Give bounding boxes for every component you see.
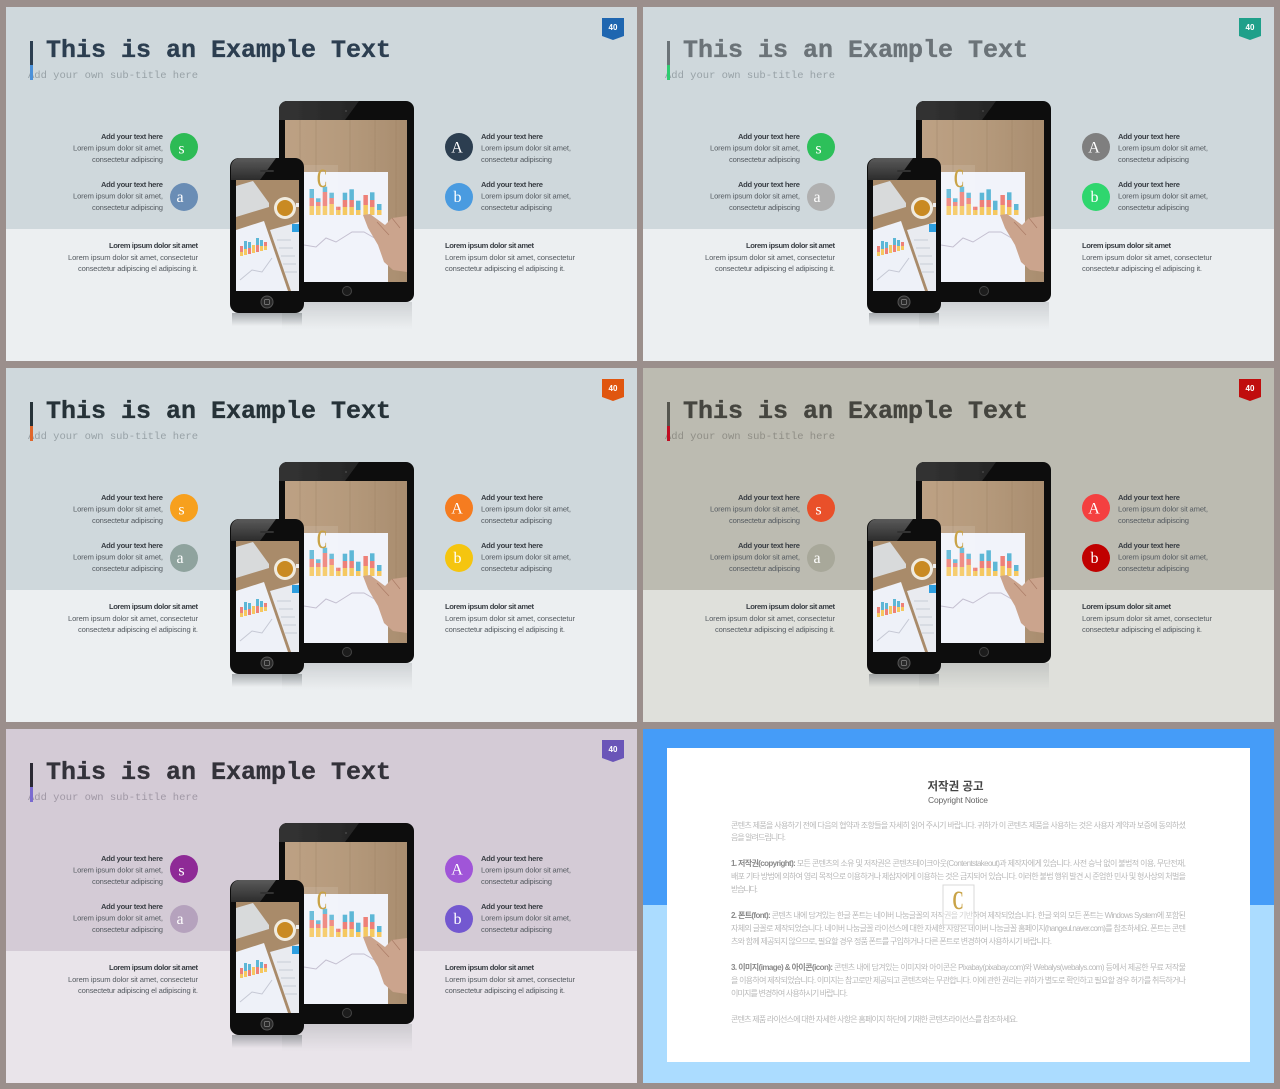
text block: right top: consectetur adipiscing [1118,155,1189,164]
page badge: 40 [1246,23,1255,32]
subtitle: Add your own sub-title here [665,70,835,82]
text block: right top: consectetur adipiscing [481,877,552,886]
text block: bottom left [705,602,835,634]
text block: bottom right: consectetur adipiscing el adipiscing it. [1082,264,1202,273]
icon: s: s [178,862,185,880]
text block: right second: Lorem ipsum dolor sit amet, [1118,552,1208,562]
icon: a [807,183,835,211]
text block: left top: Add your text here [101,854,163,863]
text block: left second: Lorem ipsum dolor sit amet, [710,552,800,562]
icon: s: s [815,140,822,158]
panel background [643,729,1274,1083]
text block: left top [710,493,800,525]
text block: left second: Lorem ipsum dolor sit amet, [710,192,800,200]
text block: bottom left: consectetur adipiscing el adipiscing it. [715,625,835,634]
text block: right second [1118,180,1208,212]
text block: left second [73,541,163,573]
paragraph 2: font: 2. 폰트(font): 콘텐츠 내에 담겨있는 한글 폰트는 네이버 나눔글꼴의 저작권을 기반하여 제작되었습니다. 한글 외의 모든 폰트는 Windows System에 포함된 [731,910,1186,920]
text block: left top: Add your text here [738,493,800,502]
text block: left top: Lorem ipsum dolor sit amet, [73,504,163,514]
text block: left top: consectetur adipiscing [729,155,800,164]
icon: A: A [1088,140,1100,156]
watermark logo: C [952,886,964,915]
text block: left second: Add your text here [101,902,163,911]
text block: bottom right [1082,602,1212,634]
intro paragraph: 콘텐츠 제품을 사용하기 전에 다음의 협약과 조항들을 자세히 읽어 주시기 바랍니다. 귀하가 이 콘텐츠 제품을 사용하는 것은 사용자 계약과 보증에 동의하셨 [731,820,1187,830]
icon: s: s [178,502,185,518]
icon: a: a [176,911,184,928]
watermark logo [943,885,974,925]
text block: bottom left: Lorem ipsum dolor sit amet [746,602,835,611]
text block: right top: Add your text here [481,854,543,863]
subtitle: Add your own sub-title here [665,431,835,443]
paragraph 2: font: 자체의 글꼴로 제작되었습니다. 네이버 나눔글꼴 라이선스에 대한 자세한 사항은 네이버 나눔글꼴 홈페이지(hangeul.naver.com)를 참조하세요. 폰트는 콘텐 [731,923,1186,933]
paragraph 2: font [731,910,1186,946]
paragraph 3: image and icon: 3. 이미지(image) & 아이콘(icon): 콘텐츠 내에 담겨있는 이미지와 아이콘은 Pixabay(pixabay.com)와 Webalys(webalys.com) 등에서 제공한 무료 저작물 [731,962,1186,972]
accent bar [667,402,670,441]
text block: right second [1118,541,1208,573]
subtitle: Add your own sub-title here [28,792,198,804]
panel background [6,7,637,361]
text block: left top [73,132,163,164]
text block: bottom left: consectetur adipiscing el adipiscing it. [715,264,835,273]
intro paragraph: 음을 알려드립니다. [731,832,786,842]
text block: left second: Lorem ipsum dolor sit amet, [73,192,163,200]
text block: left top: Add your text here [738,132,800,141]
page badge [1239,379,1261,401]
text block: right second: Lorem ipsum dolor sit amet, [481,914,571,922]
icon: b: b [454,189,462,206]
text block: right top: Lorem ipsum dolor sit amet, [1118,144,1208,152]
text block: bottom left: Lorem ipsum dolor sit amet, consectetur [68,253,198,262]
text block: left second: Add your text here [738,541,800,550]
icon: a [170,544,198,572]
text block: right top: Lorem ipsum dolor sit amet, [481,866,571,874]
icon: a [807,544,835,572]
text block: bottom left [68,602,198,634]
text block: right top: consectetur adipiscing [481,516,552,525]
device mockup [867,462,1051,690]
icon: A: A [451,140,463,156]
icon: A [445,133,473,161]
text block: right second [481,902,571,934]
accent bar [30,763,33,802]
panel background [6,729,637,1083]
text block: bottom left: Lorem ipsum dolor sit amet [109,241,198,250]
page badge [1239,18,1261,40]
text block: bottom left: Lorem ipsum dolor sit amet, consectetur [68,975,198,984]
device mockup [230,462,414,690]
icon: A [1082,133,1110,161]
accent bar [30,41,33,80]
icon: A: A [451,862,463,878]
paragraph 2: font: 츠와 함께 제공되지 않으므로, 필요할 경우 정품 폰트를 구입하거나 다른 폰트로 변경하여 사용하시기 바랍니다. [731,936,1052,946]
text block: bottom right: consectetur adipiscing el adipiscing it. [445,986,565,995]
text block: left top: consectetur adipiscing [92,155,163,164]
icon: s [170,494,198,522]
device mockup [230,101,414,329]
icon: A [445,855,473,883]
text block: bottom right: Lorem ipsum dolor sit amet [445,241,534,250]
text block: right top [481,132,571,164]
accent bar [30,402,33,441]
text block: bottom right: Lorem ipsum dolor sit amet, consectetur [1082,614,1212,623]
text block: left top: Lorem ipsum dolor sit amet, [710,144,800,152]
panel: slide 5 purple [6,729,637,1083]
text block: right top: Add your text here [481,132,543,141]
text block: bottom right [445,963,575,995]
page badge [602,379,624,401]
panel background [6,368,637,722]
icon: a [170,905,198,933]
icon: b: b [454,911,462,928]
text block: bottom right [1082,241,1212,273]
icon: A [445,494,473,522]
text block: right second: Lorem ipsum dolor sit amet, [481,552,571,562]
paragraph 1: copyright: 1. 저작권(copyright): 모든 콘텐츠의 소유 및 저작권은 콘텐츠테이크아웃(Contentstakeout)과 제작자에게 있습니다. 사전 승낙 없이 불법적 이용, 무단전재, [731,858,1186,868]
icon: b [1082,183,1110,211]
text block: bottom left [68,963,198,995]
text block: left second: Lorem ipsum dolor sit amet, [73,914,163,922]
subheading: Copyright Notice [928,795,988,805]
title: This is an Example Text [46,397,391,426]
device mockup [867,101,1051,329]
paragraph 3: image and icon: 을 이용하여 제작되었습니다. 이미지는 참고로만 제공되고 콘텐츠와는 무관합니다. 이에 관한 권리는 귀하가 별도로 확인하고 필요할 경우 허가를 취득하거나 [731,975,1187,985]
title: This is an Example Text [46,36,391,65]
text block: bottom right: consectetur adipiscing el adipiscing it. [445,625,565,634]
icon: b: b [1090,189,1098,206]
text block: left second: Lorem ipsum dolor sit amet, [73,552,163,562]
text block: bottom right [445,241,575,273]
closing paragraph: 콘텐츠 제품 라이선스에 대한 자세한 사항은 홈페이지 하단에 기재한 콘텐츠라이선스를 참조하세요. [731,1014,1018,1024]
icon: s [170,133,198,161]
text block: right second [481,541,571,573]
page badge: 40 [609,745,618,754]
text block: bottom left: consectetur adipiscing el adipiscing it. [78,625,198,634]
text block: left top: Add your text here [101,132,163,141]
paragraph 1: copyright [731,858,1186,894]
icon: a: a [813,550,821,567]
text block: bottom left: consectetur adipiscing el adipiscing it. [78,264,198,273]
panel background [643,368,1274,722]
text block: left second: consectetur adipiscing [729,203,800,212]
paragraph 1: copyright: 배포 기타 방법에 의하여 영리 목적으로 이용하거나 제삼자에게 이용하는 것은 금지되어 있습니다. 이러한 불법 행위 발견 시 준엄한 민사 및 형사상의 처벌을 [731,871,1186,881]
text block: left second: consectetur adipiscing [92,925,163,934]
text block: left top: Add your text here [101,493,163,502]
text block: right top: Lorem ipsum dolor sit amet, [481,504,571,514]
page badge: 40 [609,23,618,32]
text block: right second: consectetur adipiscing [1118,203,1189,212]
device mockup [230,823,414,1051]
text block: right top: Lorem ipsum dolor sit amet, [1118,504,1208,514]
icon: s [807,133,835,161]
icon: s: s [178,140,185,158]
title: This is an Example Text [46,758,391,787]
panel: slide 2 green [643,7,1274,361]
panel: slide 3 orange [6,368,637,722]
icon: a [170,183,198,211]
text block: right top: Add your text here [1118,493,1180,502]
icon: b [445,905,473,933]
heading: 저작권 공고 [927,779,984,793]
icon: a: a [813,189,821,206]
text block: right second: Add your text here [481,541,543,550]
text block: right top [1118,132,1208,164]
page badge: 40 [609,384,618,393]
page badge [602,18,624,40]
text block: bottom right [445,602,575,634]
text block: right second: consectetur adipiscing [481,203,552,212]
text block: right second: Add your text here [481,902,543,911]
icon: A: A [451,500,463,518]
panel: copyright notice [643,729,1274,1083]
text block: bottom left: consectetur adipiscing el adipiscing it. [78,986,198,995]
text block: right top: consectetur adipiscing [1118,516,1189,525]
text block: right second: consectetur adipiscing [481,564,552,573]
subtitle: Add your own sub-title here [28,70,198,82]
text block: left top: Lorem ipsum dolor sit amet, [73,144,163,152]
paragraph 3: image and icon: 이미지를 변경하여 사용하시기 바랍니다. [731,988,848,998]
text block: right top: consectetur adipiscing [481,155,552,164]
text block: right top [481,493,571,525]
text block: bottom right: Lorem ipsum dolor sit amet, consectetur [445,975,575,984]
text block: bottom left: Lorem ipsum dolor sit amet, consectetur [705,253,835,262]
icon: a: a [176,189,184,206]
icon: s [807,494,835,522]
text block: right second [481,180,571,212]
text block: right second: Add your text here [1118,541,1180,550]
text block: right top: Add your text here [481,493,543,502]
text block: right top: Add your text here [1118,132,1180,141]
text block: left top: Lorem ipsum dolor sit amet, [710,504,800,514]
title: This is an Example Text [683,397,1028,426]
text block: right second: consectetur adipiscing [1118,564,1189,573]
text block: right top [1118,493,1208,525]
title: This is an Example Text [683,36,1028,65]
intro paragraph [731,820,1187,842]
text block: left second: consectetur adipiscing [92,564,163,573]
text block: bottom right: Lorem ipsum dolor sit amet [445,602,534,611]
subtitle: Add your own sub-title here [28,431,198,443]
text block: right second: consectetur adipiscing [481,925,552,934]
text block: left second: consectetur adipiscing [92,203,163,212]
icon: b [1082,544,1110,572]
icon: a: a [176,550,184,567]
text block: left top: consectetur adipiscing [92,516,163,525]
text block: left top [710,132,800,164]
text block: right second: Add your text here [1118,180,1180,189]
white card [667,748,1250,1062]
text block: bottom right: Lorem ipsum dolor sit amet [445,963,534,972]
text block: bottom left: Lorem ipsum dolor sit amet [109,602,198,611]
text block: left second [73,180,163,212]
text block: left top [73,493,163,525]
text block: left top: consectetur adipiscing [729,516,800,525]
icon: b [445,183,473,211]
paragraph 3: image and icon [731,962,1187,998]
text block: bottom right: Lorem ipsum dolor sit amet [1082,602,1171,611]
text block: bottom left: Lorem ipsum dolor sit amet, consectetur [705,614,835,623]
text block: right second: Lorem ipsum dolor sit amet, [1118,192,1208,200]
paragraph 1: copyright: 받습니다. [731,884,758,894]
text block: bottom left: Lorem ipsum dolor sit amet, consectetur [68,614,198,623]
text block: right second: Lorem ipsum dolor sit amet, [481,192,571,200]
text block: bottom right: Lorem ipsum dolor sit amet, consectetur [1082,253,1212,262]
text block: bottom left: Lorem ipsum dolor sit amet [746,241,835,250]
text block: left second: consectetur adipiscing [729,564,800,573]
text block: bottom right: Lorem ipsum dolor sit amet, consectetur [445,614,575,623]
text block: left top [73,854,163,886]
icon: b: b [454,550,462,567]
text block: left second: Add your text here [101,180,163,189]
text block: left second [710,541,800,573]
text block: right top [481,854,571,886]
icon: b: b [1090,550,1098,567]
page badge [602,740,624,762]
text block: bottom right: Lorem ipsum dolor sit amet [1082,241,1171,250]
text block: left top: Lorem ipsum dolor sit amet, [73,866,163,874]
icon: s [170,855,198,883]
panel: slide 1 blue [6,7,637,361]
text block: bottom right: consectetur adipiscing el adipiscing it. [1082,625,1202,634]
text block: left second: Add your text here [738,180,800,189]
text block: bottom right: consectetur adipiscing el adipiscing it. [445,264,565,273]
accent bar [667,41,670,80]
text block: left second [73,902,163,934]
text block: right second: Add your text here [481,180,543,189]
text block: left second: Add your text here [101,541,163,550]
icon: A: A [1088,500,1100,518]
text block: left top: consectetur adipiscing [92,877,163,886]
text block: bottom left [68,241,198,273]
panel background [643,7,1274,361]
text block: left second [710,180,800,212]
text block: right top: Lorem ipsum dolor sit amet, [481,144,571,152]
text block: bottom right: Lorem ipsum dolor sit amet, consectetur [445,253,575,262]
text block: bottom left [705,241,835,273]
icon: A [1082,494,1110,522]
panel: slide 4 red [643,368,1274,722]
text block: bottom left: Lorem ipsum dolor sit amet [109,963,198,972]
page badge: 40 [1246,384,1255,393]
icon: b [445,544,473,572]
icon: s: s [815,502,822,518]
